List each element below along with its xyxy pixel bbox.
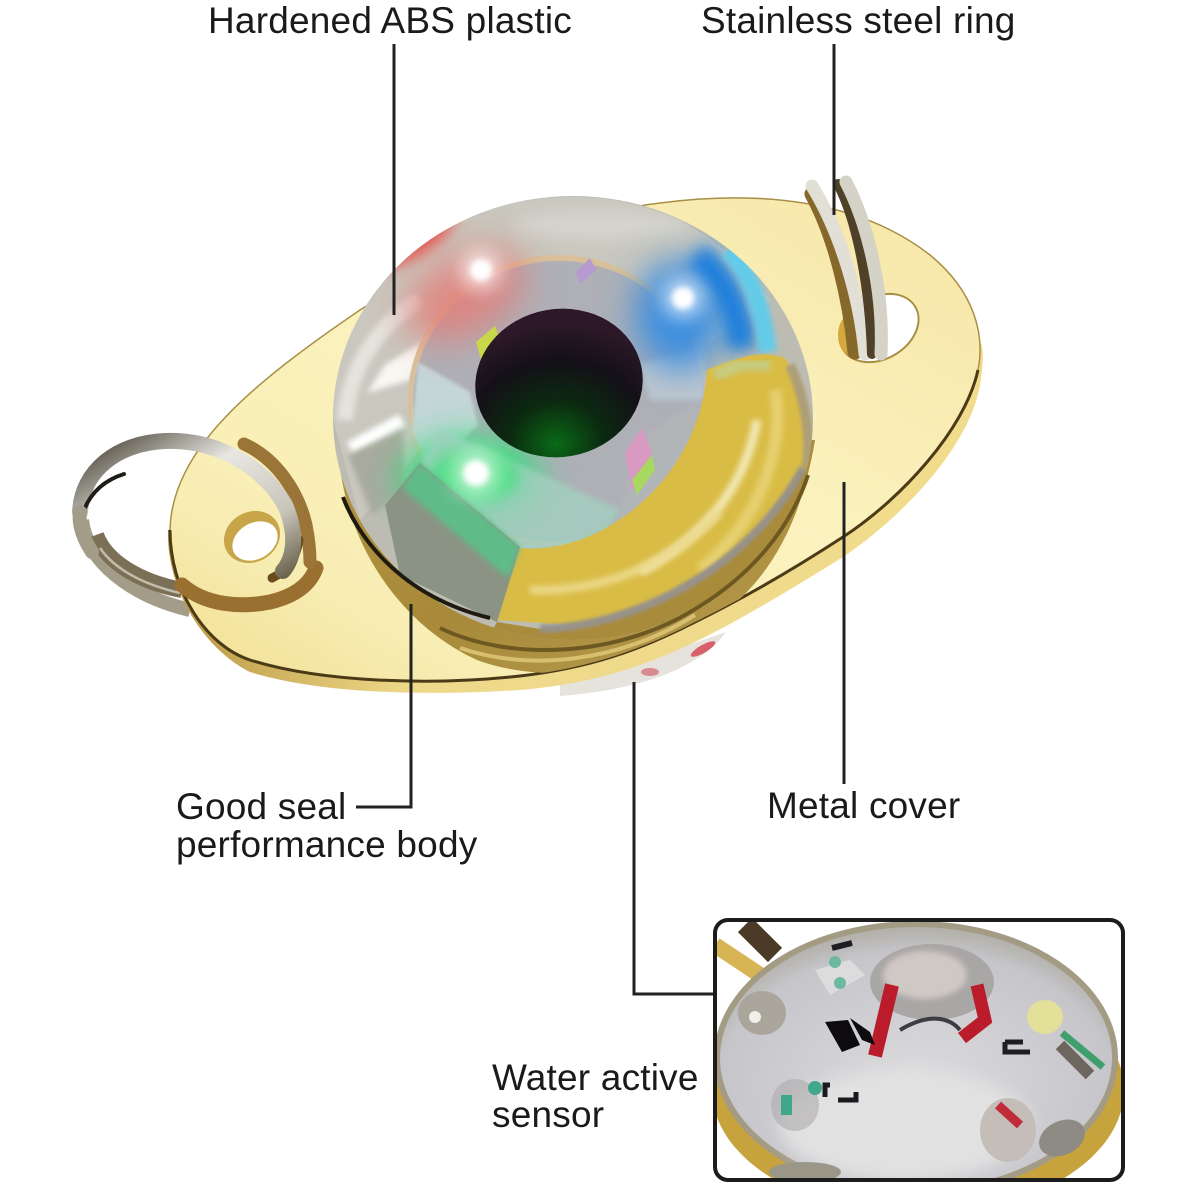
black chip (825, 1020, 860, 1052)
icon: ring strands behind plate (82, 520, 190, 610)
icon: transparent dome with eye (333, 196, 825, 670)
label: Good seal performance body (176, 604, 478, 865)
left LED (738, 991, 786, 1035)
yellow lower section (497, 354, 811, 627)
label: Water active sensor (492, 682, 714, 1135)
clear dome (717, 924, 1115, 1192)
iris (408, 255, 706, 459)
lower left components (771, 1079, 819, 1131)
label: Good seal performance body: performance body (176, 824, 478, 865)
label: Hardened ABS plastic: Hardened ABS plastic (208, 0, 572, 41)
dark green wedge (385, 463, 520, 622)
glass tint and outer highlights (333, 197, 770, 520)
milky centre (778, 1076, 1014, 1178)
icon: top stainless steel ring (812, 182, 881, 354)
plate side wall (168, 340, 983, 693)
sealed gold body under dome (338, 440, 815, 673)
red wires (875, 985, 892, 1056)
upper left component (815, 960, 865, 995)
gold base (717, 1060, 1121, 1178)
right hole (827, 280, 931, 376)
dark seal line (343, 497, 490, 618)
label: Water active sensor: Water active (492, 1057, 699, 1098)
lower right LED (980, 1098, 1036, 1162)
base stripes (440, 475, 808, 661)
label: Water active sensor: sensor (492, 1094, 604, 1135)
LED hot spots (459, 248, 503, 292)
icon: left split ring (80, 441, 316, 605)
label: Metal cover: Metal cover (767, 785, 960, 826)
right components (1027, 1000, 1063, 1034)
central LED (870, 944, 994, 1020)
prism glints (476, 326, 498, 360)
plate face (170, 198, 980, 681)
panel: sensor close-up inset (712, 918, 1125, 1200)
icon: gold oval metal plate (168, 198, 983, 693)
coloured LED glows (387, 221, 464, 278)
plate edge line (170, 370, 978, 681)
underside sensor peek (560, 632, 726, 696)
left hole (214, 501, 290, 573)
label: Good seal performance body: Good seal (176, 786, 346, 827)
label: Stainless steel ring: Stainless steel ring (701, 0, 1016, 41)
base seen through glass (494, 468, 806, 640)
green glow (400, 438, 540, 522)
pupil (463, 296, 655, 470)
